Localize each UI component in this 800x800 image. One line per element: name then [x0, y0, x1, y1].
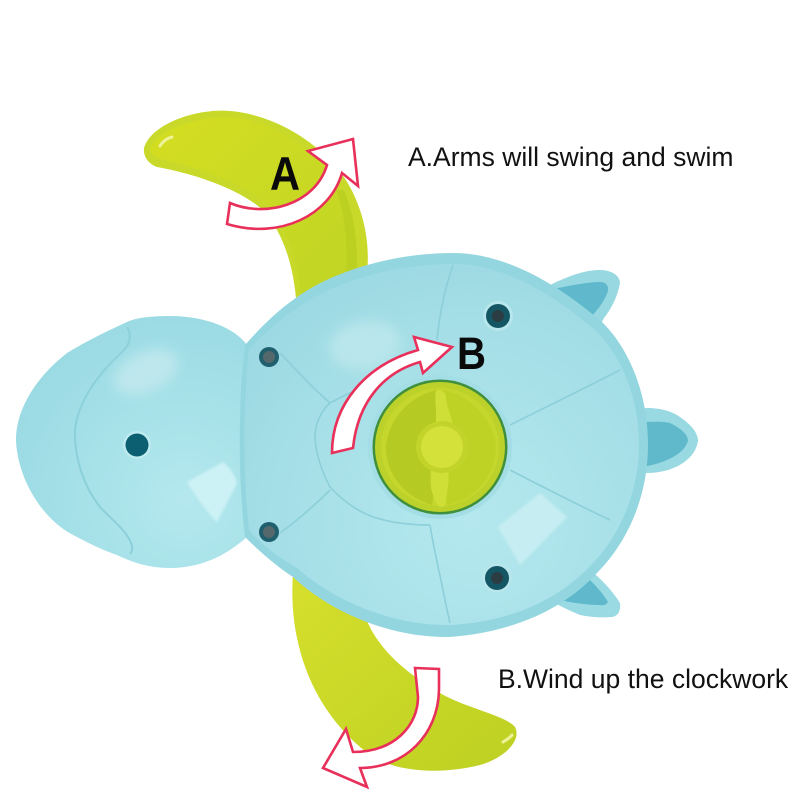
label: B: B: [457, 328, 486, 379]
icon: upper yellow arm: [144, 111, 368, 314]
fin: right: [613, 408, 698, 475]
head hole: [123, 431, 151, 459]
icon: head: [16, 316, 247, 568]
knob hub: [416, 421, 468, 473]
shell soft highlight: [325, 315, 405, 375]
fin: top right: [540, 270, 620, 328]
label: A: A: [270, 147, 300, 200]
head soft highlight: [107, 340, 185, 404]
shell glossy highlight: [498, 493, 567, 565]
arrow: B wind arrow: [332, 337, 452, 453]
screw: upper left: [259, 347, 279, 367]
shell seams: [280, 265, 620, 623]
icon: clockwork knob: [368, 375, 512, 519]
head glossy highlight: [187, 462, 237, 522]
arrow: lower swing arrow: [323, 668, 439, 787]
screw: top right: [483, 301, 513, 331]
fin: bottom right: [545, 567, 620, 617]
screw: lower left: [259, 522, 279, 542]
text: caption A: A.Arms will swing and swim: [408, 142, 733, 172]
icon: lower yellow arm: [292, 573, 517, 771]
shell face: [244, 264, 639, 625]
text: caption B: B.Wind up the clockwork: [498, 664, 789, 694]
head seam: [75, 327, 132, 554]
shell rim: [240, 253, 648, 637]
arrow: A swing arrow: [227, 139, 358, 229]
screw: bottom right: [482, 563, 512, 593]
panel: turtle shell: [240, 253, 648, 637]
icon: screws: [259, 301, 513, 593]
icon: body fins: [540, 270, 698, 617]
knob wings: [430, 390, 453, 507]
